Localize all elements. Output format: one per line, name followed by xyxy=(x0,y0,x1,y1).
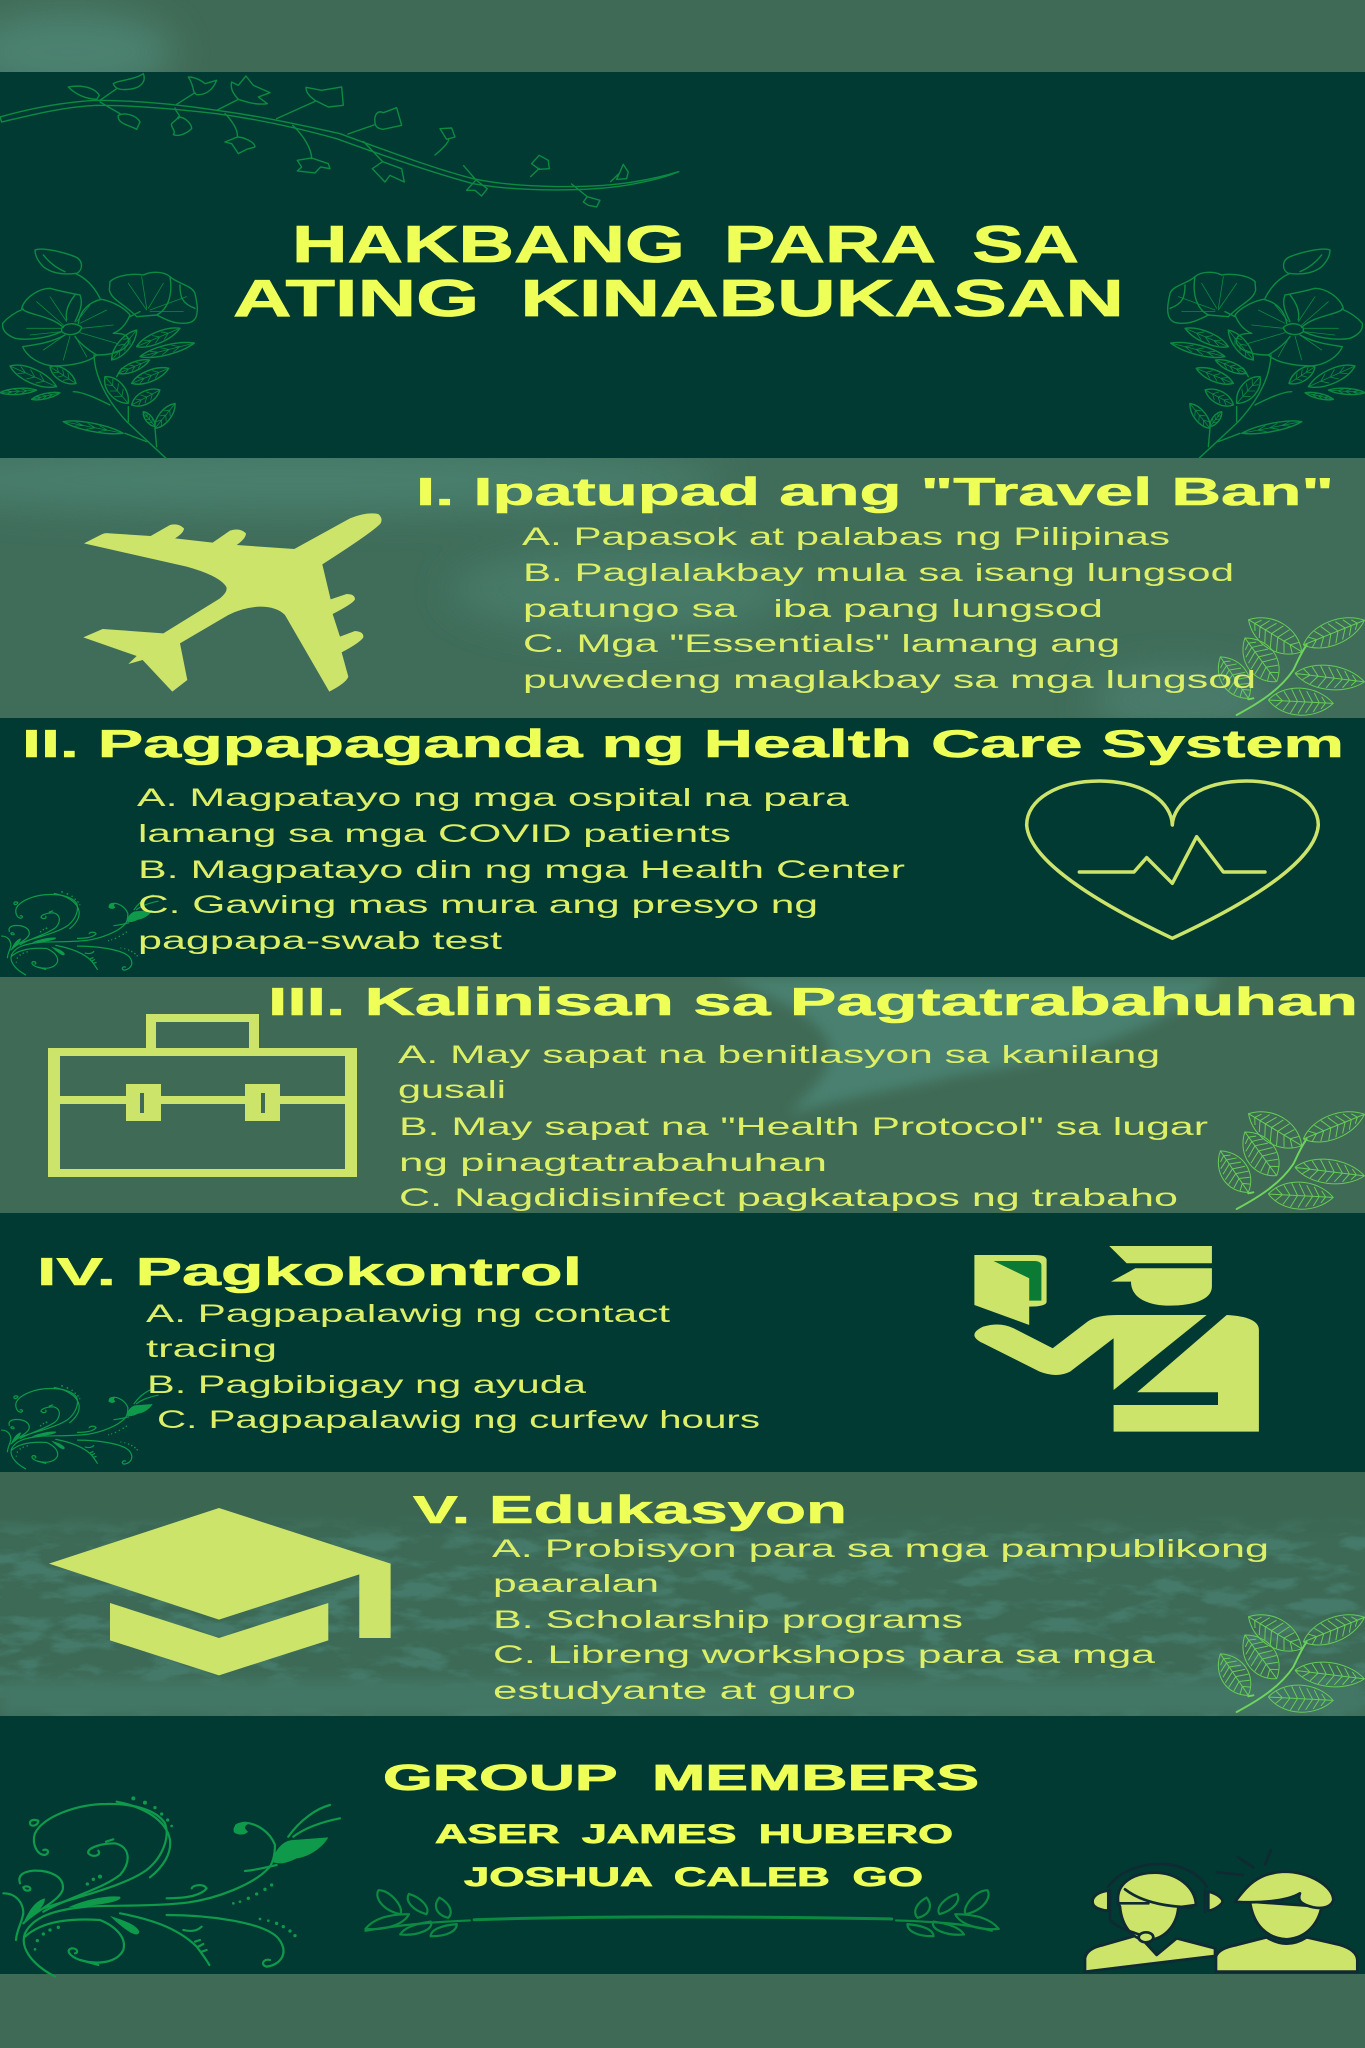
panel: header dark band xyxy=(0,72,1365,458)
text: section II list: lamang sa mga COVID patients xyxy=(138,820,731,848)
heading: section III: III. Kalinisan sa Pagtatrabahuhan xyxy=(268,981,1358,1024)
text: member names: ASER JAMES HUBERO xyxy=(435,1819,953,1849)
icon: small swirl xyxy=(2,1385,158,1469)
text: section III list: ng pinagtatrabahuhan xyxy=(399,1149,827,1177)
text: section I list: puwedeng maglakbay sa mga lungsod xyxy=(523,666,1256,694)
text: section III list: gusali xyxy=(398,1076,506,1104)
text: member names: JOSHUA CALEB GO xyxy=(464,1862,923,1892)
icon: flower right xyxy=(1168,249,1365,458)
text: section II list xyxy=(137,784,905,955)
icon: small swirl xyxy=(2,891,158,975)
panel: group members xyxy=(3,1757,1357,1977)
heading: section V: V. Edukasyon xyxy=(413,1489,847,1532)
text: section II list: C. Gawing mas mura ang presyo ng xyxy=(138,891,818,919)
icon: leaf sprig xyxy=(1209,1102,1365,1211)
icon: flowering branch xyxy=(0,74,679,207)
text: section V list xyxy=(492,1535,1269,1705)
icon: airplane xyxy=(83,513,382,692)
text: section I list: C. Mga "Essentials" lamang ang xyxy=(523,630,1120,658)
icon: graduation cap xyxy=(49,1508,391,1675)
panel: section V education xyxy=(49,1489,1365,1714)
title: HAKBANG PARA SA xyxy=(292,216,1079,274)
text: section III list: A. May sapat na benitlasyon sa kanilang xyxy=(398,1041,1160,1069)
text: section I list xyxy=(522,523,1256,694)
text: section V list: A. Probisyon para sa mga pampublikong xyxy=(492,1535,1269,1563)
text: section V list: B. Scholarship programs xyxy=(493,1606,963,1634)
heading: section II: II. Pagpapaganda ng Health Care System xyxy=(22,723,1344,766)
icon: heart with pulse xyxy=(1027,781,1318,938)
icon: large swirl xyxy=(3,1796,340,1977)
icon: divider with leaves xyxy=(365,1890,999,1936)
text: section III list: B. May sapat na "Health Protocol" sa lugar xyxy=(399,1113,1208,1141)
icon: two people with headset xyxy=(1085,1850,1357,1972)
icon: leaf sprig xyxy=(1209,1605,1365,1714)
text: section IV list: tracing xyxy=(146,1335,277,1363)
panel: group members dark band xyxy=(0,1716,1365,1974)
heading: section IV: IV. Pagkokontrol xyxy=(37,1251,582,1294)
heading: group members: GROUP MEMBERS xyxy=(383,1757,979,1798)
panel: section II health care xyxy=(2,723,1344,975)
panel: section I travel ban xyxy=(83,471,1365,717)
text: section IV list: B. Pagbibigay ng ayuda xyxy=(147,1371,586,1399)
text: section II list: B. Magpatayo din ng mga Health Center xyxy=(138,856,905,884)
text: section IV list: A. Pagpapalawig ng contact xyxy=(146,1300,670,1328)
icon: leaf sprig xyxy=(1209,608,1365,717)
heading: section I: I. Ipatupad ang "Travel Ban" xyxy=(416,471,1334,514)
text: section V list: paaralan xyxy=(493,1570,659,1598)
icon: briefcase xyxy=(48,1014,357,1177)
text: section V list: C. Libreng workshops para sa mga xyxy=(493,1641,1155,1669)
text: section I list: A. Papasok at palabas ng Pilipinas xyxy=(522,523,1170,551)
text: section I list: B. Paglalakbay mula sa isang lungsod xyxy=(523,559,1234,587)
text: section II list: pagpapa-swab test xyxy=(138,927,502,955)
text: section III list xyxy=(398,1041,1208,1212)
panel: section II dark band xyxy=(0,718,1365,977)
text: section V list: estudyante at guro xyxy=(493,1677,856,1705)
title: ATING KINABUKASAN xyxy=(233,270,1124,328)
icon: flower left xyxy=(0,249,197,458)
panel: section III cleanliness xyxy=(48,981,1365,1212)
text: section IV list: C. Pagpapalawig ng curfew hours xyxy=(157,1406,760,1434)
icon: officer with passport xyxy=(974,1246,1259,1432)
panel: section IV dark band xyxy=(0,1213,1365,1472)
text: member names xyxy=(435,1819,953,1892)
panel: section IV control xyxy=(2,1246,1259,1469)
text: section IV list xyxy=(146,1300,760,1434)
text: section II list: A. Magpatayo ng mga ospital na para xyxy=(137,784,849,812)
text: section I list: patungo sa iba pang lungsod xyxy=(523,595,1103,623)
title xyxy=(233,216,1124,328)
text: section III list: C. Nagdidisinfect pagkatapos ng trabaho xyxy=(399,1184,1178,1212)
